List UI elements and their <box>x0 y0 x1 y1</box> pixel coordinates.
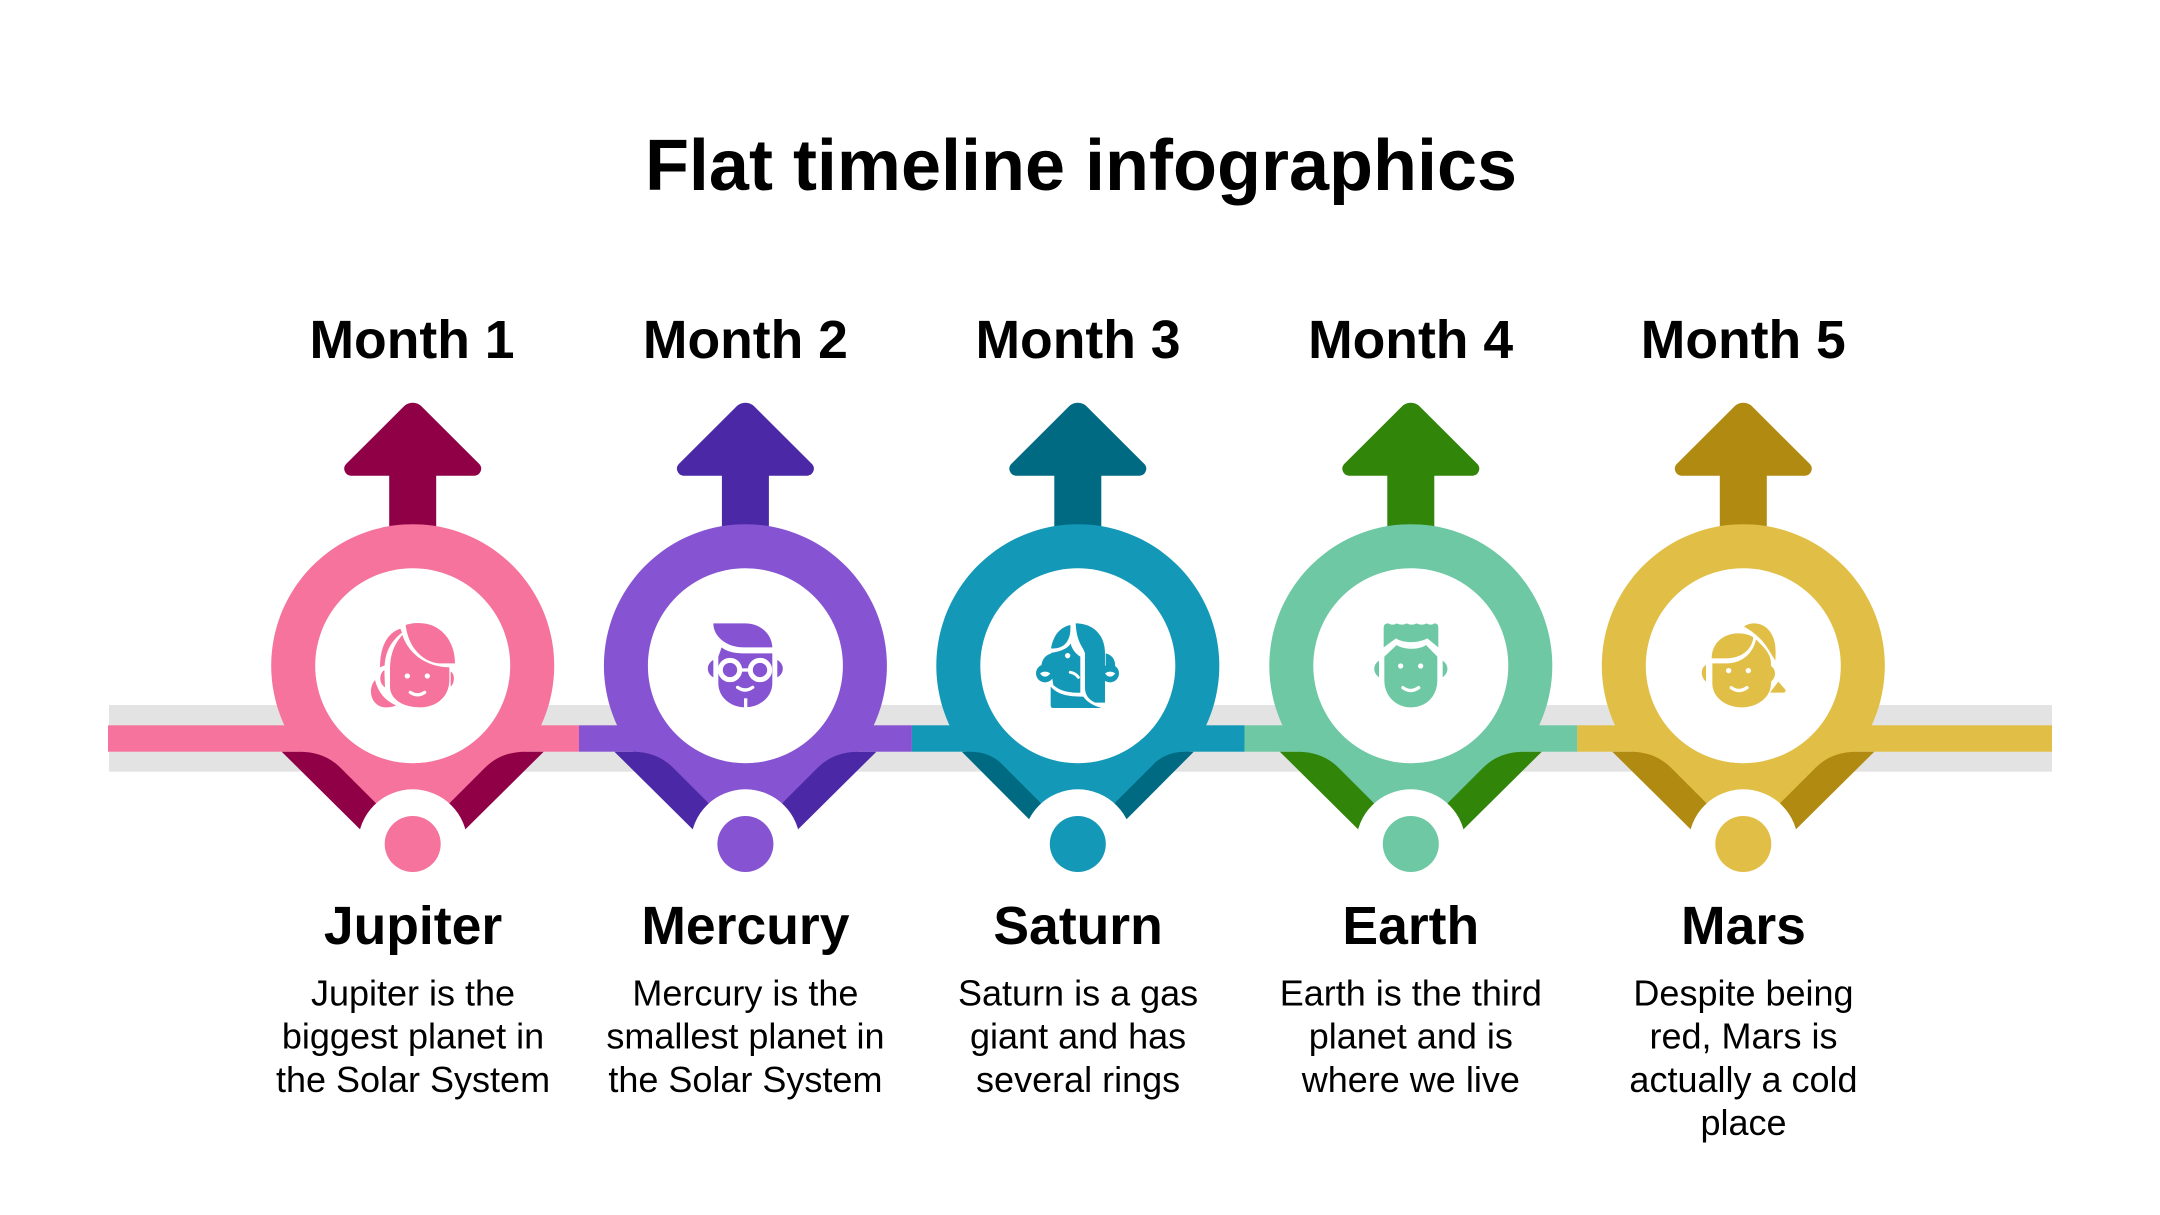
pin 4 <box>1269 403 1552 899</box>
planet name: Mars: Mars <box>1681 897 1806 956</box>
timeline segment 3 <box>912 725 1245 752</box>
dark wedges <box>962 752 1194 830</box>
timeline segment 1 <box>108 725 579 752</box>
description: Mars: Despite being <box>1633 972 1854 1014</box>
description: Mercury: smallest planet in <box>606 1016 884 1057</box>
white notch <box>1689 789 1798 899</box>
description: Saturn: several rings <box>976 1059 1180 1100</box>
arrow up <box>677 403 814 540</box>
panel: month 2 Mercury <box>579 311 912 1100</box>
description: Saturn: Saturn is a gas <box>958 972 1198 1014</box>
description: Mercury: the Solar System <box>608 1059 882 1100</box>
arrow up <box>1675 403 1812 540</box>
planet name: Earth: Earth <box>1342 897 1479 956</box>
timeline segment 4 <box>1245 725 1577 752</box>
white notch <box>358 789 467 899</box>
white notch <box>691 789 800 899</box>
dot <box>385 816 441 872</box>
description: Mercury: Mercury is the <box>632 972 858 1014</box>
heading: Month 1: Month 1 <box>309 311 515 370</box>
dark wedges <box>614 752 876 830</box>
planet name: Saturn: Saturn <box>993 897 1163 956</box>
description: Earth: planet and is <box>1309 1016 1513 1057</box>
arrow up <box>344 403 481 540</box>
inner white circle <box>315 568 510 763</box>
heading: Month 5: Month 5 <box>1641 311 1846 370</box>
description: Mars: place <box>1700 1102 1787 1143</box>
dark wedges <box>282 752 544 830</box>
heading: Month 4: Month 4 <box>1308 311 1513 370</box>
description: Saturn: giant and has <box>970 1016 1186 1057</box>
planet name: Jupiter: Jupiter <box>324 897 502 956</box>
description: Earth: where we live <box>1301 1059 1520 1100</box>
white notch <box>1023 789 1132 899</box>
description: Jupiter: Jupiter is the <box>311 972 515 1014</box>
ring <box>1602 524 1885 810</box>
arrow up <box>1342 403 1479 540</box>
dot <box>1715 816 1771 872</box>
pin 1 <box>271 403 554 899</box>
ring <box>936 524 1219 810</box>
icon: woman with bun <box>371 623 455 707</box>
description: Mars: red, Mars is <box>1649 1016 1838 1057</box>
icon: woman with ponytail <box>1702 623 1786 707</box>
heading: Month 2: Month 2 <box>643 311 848 370</box>
dark wedges <box>1280 752 1542 830</box>
icon: woman with long hair <box>1036 623 1119 708</box>
planet name: Mercury: Mercury <box>641 897 850 956</box>
heading: Month 3: Month 3 <box>975 311 1181 370</box>
panel: month 5 Mars <box>1577 311 2052 1143</box>
arrow up <box>1009 403 1146 540</box>
dot <box>1050 816 1106 872</box>
title: Flat timeline infographics <box>645 126 1517 206</box>
inner white circle <box>648 568 843 763</box>
description: Jupiter: biggest planet in <box>282 1016 544 1057</box>
inner white circle <box>980 568 1175 763</box>
dot <box>1383 816 1439 872</box>
panel: month 4 Earth <box>1245 311 1577 1100</box>
ring <box>604 524 887 810</box>
ring <box>271 524 554 810</box>
timeline grey band <box>109 705 2052 772</box>
dot <box>717 816 773 872</box>
dark wedges <box>1612 752 1874 830</box>
pin 5 <box>1602 403 1885 899</box>
inner white circle <box>1646 568 1841 763</box>
icon: man with glasses <box>708 623 783 708</box>
description: Earth: Earth is the third <box>1280 972 1542 1014</box>
icon: man with short hair <box>1374 623 1447 707</box>
pin 2 <box>604 403 887 899</box>
white notch <box>1356 789 1466 899</box>
description: Mars: actually a cold <box>1629 1059 1858 1100</box>
panel: month 1 Jupiter <box>108 311 579 1100</box>
timeline segment 2 <box>579 725 912 752</box>
inner white circle <box>1313 568 1508 763</box>
description: Jupiter: the Solar System <box>276 1059 550 1100</box>
panel: month 3 Saturn <box>912 311 1245 1100</box>
pin 3 <box>936 403 1219 899</box>
ring <box>1269 524 1552 810</box>
timeline segment 5 <box>1577 725 2052 752</box>
